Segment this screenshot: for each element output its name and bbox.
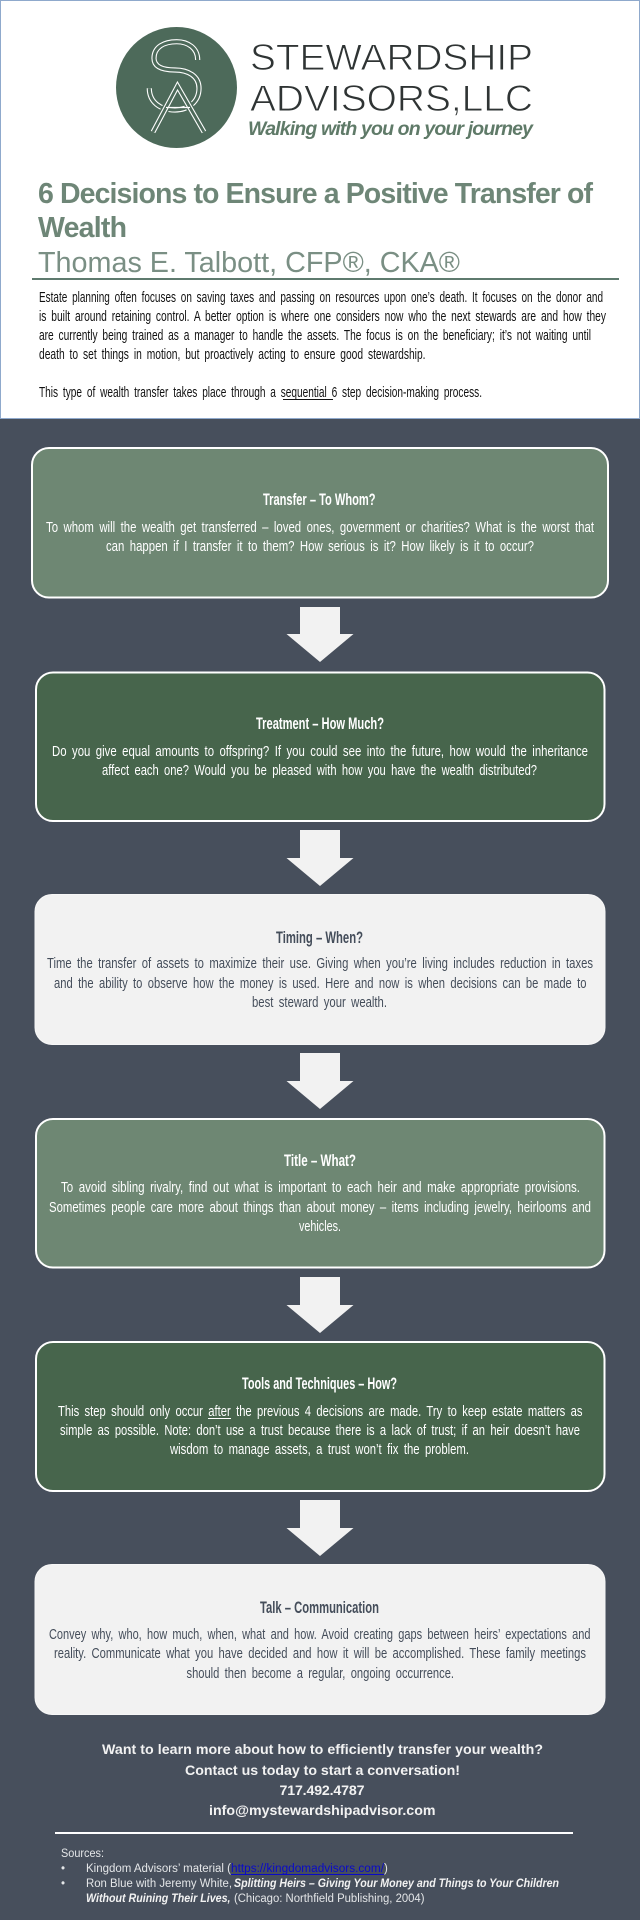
call to action: info@mystewardshipadvisor.com bbox=[209, 1803, 436, 1819]
intro text: death to set things in motion, but proactively acting to ensure good stewardship. bbox=[39, 346, 426, 363]
body: timing bbox=[47, 955, 593, 1011]
arrow bbox=[286, 1277, 354, 1333]
heading: transfer: Transfer – To Whom? bbox=[263, 491, 376, 509]
sources: Sources: bbox=[61, 1848, 104, 1860]
sources: Splitting Heirs – Giving Your Money and Things to Your Children bbox=[234, 1878, 559, 1890]
panel: treatment bbox=[36, 672, 604, 821]
panel: transfer bbox=[32, 448, 608, 598]
call to action: Contact us today to start a conversation! bbox=[185, 1763, 460, 1779]
logo bbox=[116, 27, 534, 148]
body: title bbox=[49, 1179, 591, 1235]
panel: tools bbox=[36, 1342, 604, 1491]
heading: tools: Tools and Techniques – How? bbox=[242, 1375, 397, 1393]
arrow bbox=[286, 1053, 354, 1109]
logo wordmark bbox=[248, 36, 534, 140]
arrow bbox=[286, 830, 354, 886]
body: talk bbox=[49, 1626, 590, 1682]
body: timing: best steward your wealth. bbox=[252, 994, 387, 1011]
body: tools: wisdom to manage assets, a trust won’t fix the problem. bbox=[169, 1441, 469, 1458]
logo wordmark: Walking with you on your journey bbox=[248, 118, 534, 140]
heading: treatment: Treatment – How Much? bbox=[256, 715, 384, 733]
arrow bbox=[286, 1500, 354, 1556]
heading: timing: Timing – When? bbox=[276, 929, 363, 947]
call to action bbox=[102, 1742, 543, 1819]
sources: • bbox=[61, 1878, 65, 1890]
sources: • bbox=[61, 1863, 65, 1875]
intro text bbox=[39, 289, 606, 401]
title bbox=[38, 178, 594, 244]
arrow bbox=[286, 607, 354, 662]
panel: talk bbox=[35, 1564, 605, 1714]
logo wordmark: STEWARDSHIP bbox=[250, 36, 533, 78]
panel: timing bbox=[35, 894, 605, 1044]
sources: Kingdom Advisors’ material ( bbox=[86, 1863, 231, 1875]
body: talk: should then become a regular, ongoing occurrence. bbox=[186, 1665, 454, 1682]
sources: (Chicago: Northfield Publishing, 2004) bbox=[234, 1893, 425, 1905]
call to action: 717.492.4787 bbox=[280, 1783, 365, 1799]
sources: https://kingdomadvisors.com/ bbox=[231, 1863, 385, 1875]
author: Thomas E. Talbott, CFP®, CKA® bbox=[38, 247, 460, 279]
body: treatment bbox=[52, 743, 588, 779]
heading: talk: Talk – Communication bbox=[260, 1599, 379, 1617]
body: title: vehicles. bbox=[299, 1218, 341, 1235]
body: transfer bbox=[46, 519, 595, 555]
panel: title bbox=[36, 1119, 604, 1268]
title: Wealth bbox=[38, 212, 127, 244]
body: tools bbox=[58, 1403, 582, 1458]
sources: ) bbox=[384, 1863, 388, 1875]
sources bbox=[61, 1848, 559, 1905]
heading: title: Title – What? bbox=[284, 1152, 356, 1170]
logo wordmark: ADVISORS,LLC bbox=[250, 77, 533, 119]
panel: header bbox=[0, 0, 640, 418]
sources: Ron Blue with Jeremy White, bbox=[86, 1878, 232, 1890]
sources: Without Ruining Their Lives, bbox=[86, 1893, 230, 1905]
icon: SA monogram bbox=[116, 27, 237, 148]
title: 6 Decisions to Ensure a Positive Transfer of bbox=[38, 178, 594, 210]
call to action: Want to learn more about how to efficiently transfer your wealth? bbox=[102, 1742, 543, 1758]
